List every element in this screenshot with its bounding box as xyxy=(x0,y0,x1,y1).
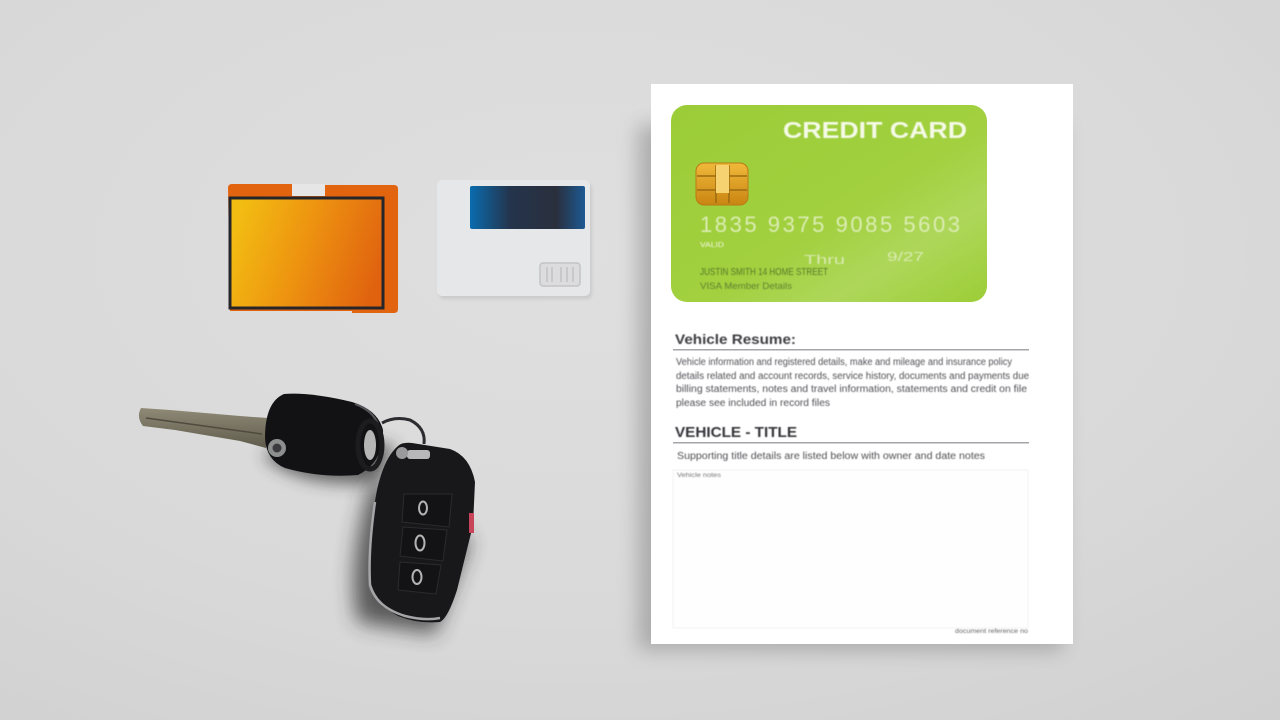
card small label: VALID xyxy=(700,242,724,249)
key ring xyxy=(382,419,424,444)
heading: vehicle section: Vehicle Resume: xyxy=(675,331,796,347)
fob body xyxy=(369,443,475,622)
text block: vehicle description xyxy=(676,357,1029,409)
cardholder address: VISA Member Details xyxy=(700,281,793,291)
card expiry: Thru xyxy=(804,252,845,267)
card title: CREDIT CARD xyxy=(783,117,967,143)
text block: title note: Supporting title details are listed below with owner and date notes xyxy=(677,451,985,462)
icon: chip xyxy=(696,163,748,205)
key head xyxy=(265,394,383,476)
text block: vehicle description: billing statements, notes and travel information, statements and credit on file xyxy=(676,384,1027,395)
text block: vehicle description: details related and account records, service history, documents and payments due xyxy=(676,371,1029,382)
card code: 9/27 xyxy=(887,249,924,264)
heading: vehicle title: VEHICLE - TITLE xyxy=(675,424,797,441)
icon: white card with blue stripe xyxy=(437,180,592,299)
panel: paper document xyxy=(638,84,1073,650)
fob buttons xyxy=(398,494,452,594)
credit card xyxy=(671,105,987,302)
icon: orange folder card xyxy=(228,184,398,313)
text block: vehicle description: please see included in record files xyxy=(676,398,830,409)
footer note: document reference no xyxy=(955,628,1028,635)
card number: 1835 9375 9085 5603 xyxy=(700,212,960,237)
key blade xyxy=(139,408,268,448)
empty form box xyxy=(673,470,1028,628)
icon: car key and fob xyxy=(139,394,475,634)
text block: vehicle description: Vehicle information and registered details, make and mileage and insurance policy xyxy=(676,357,1012,368)
empty form box: Vehicle notes xyxy=(677,473,721,479)
icon: small card emblem xyxy=(540,263,580,286)
cardholder name: JUSTIN SMITH 14 HOME STREET xyxy=(700,267,828,278)
